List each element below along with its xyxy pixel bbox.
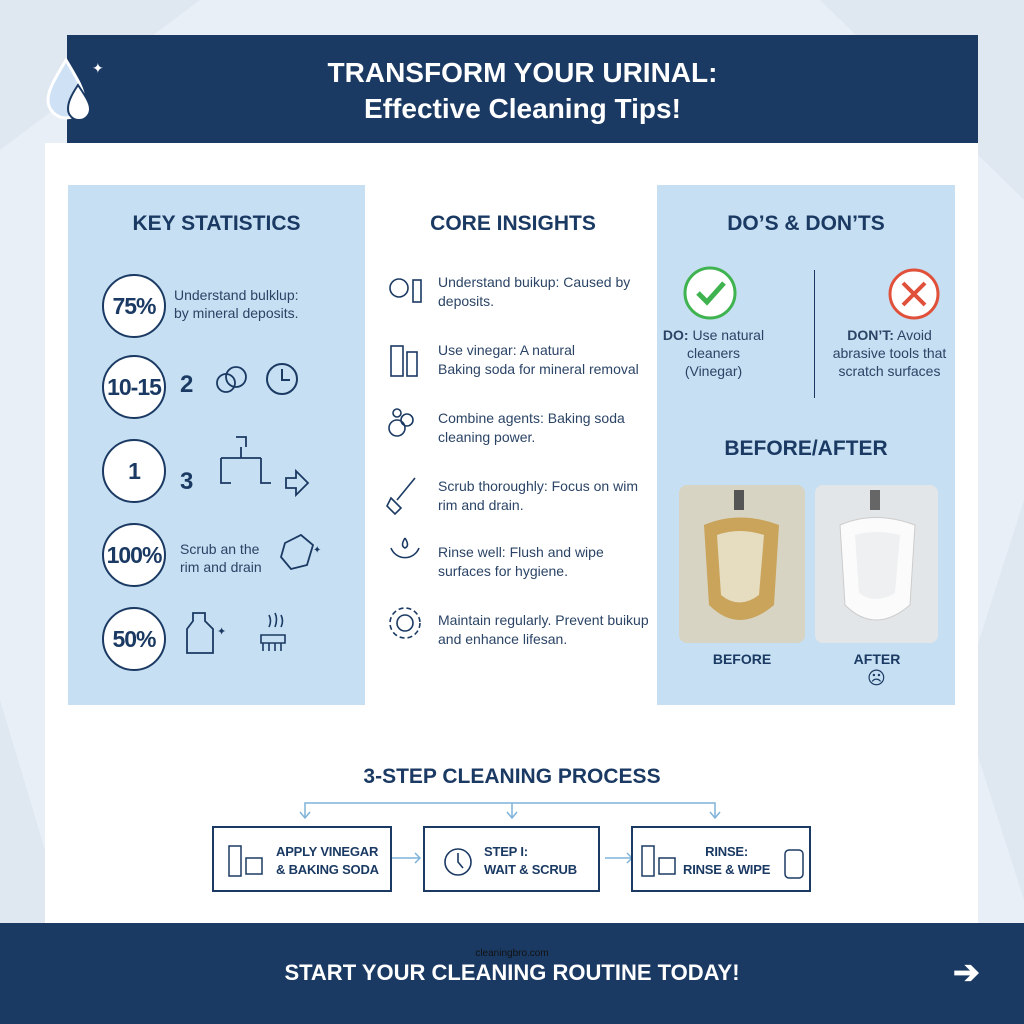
photo: before [679, 485, 805, 643]
icon: cross [888, 268, 940, 320]
dont text: DON’T: Avoid abrasive tools that scratch surfaces [833, 327, 946, 379]
text: surfaces for hygiene. [438, 563, 568, 579]
heading: core insights: CORE INSIGHTS [430, 212, 596, 235]
icon: check [684, 266, 736, 320]
panel: dos and donts [657, 185, 955, 705]
stat 10-15 [102, 355, 166, 419]
text: Combine agents: Baking soda [438, 410, 625, 426]
panel: dos and donts: ☹ [867, 668, 886, 688]
header: Effective Cleaning Tips! [364, 93, 681, 124]
header [67, 35, 978, 143]
panel: dos and donts: AFTER [854, 651, 900, 667]
text: cleaning power. [438, 429, 535, 445]
panel: key statistics [68, 185, 365, 705]
step 3 [631, 826, 811, 892]
connector arrows [300, 802, 720, 864]
panel: key statistics: ✦ [217, 626, 226, 638]
panel: key statistics: ✦ [313, 545, 321, 556]
stat 10-15: 10-15 [107, 374, 161, 400]
text: and enhance lifesan. [438, 631, 567, 647]
step 2: STEP I: [484, 844, 528, 859]
header: TRANSFORM YOUR URINAL: [328, 57, 717, 88]
heading: dos and donts: DO’S & DON’TS [727, 212, 885, 235]
step 1: APPLY VINEGAR [276, 844, 378, 859]
watermark: cleaningbro.com [475, 948, 549, 959]
icon: water drops logo: ✦ [92, 60, 104, 76]
call to action: START YOUR CLEANING ROUTINE TODAY! [284, 960, 740, 985]
text: Maintain regularly. Prevent buikup [438, 612, 649, 628]
text: Baking soda for mineral removal [438, 361, 639, 377]
panel: key statistics: by mineral deposits. [174, 305, 299, 321]
panel: key statistics: Scrub an the [180, 541, 259, 557]
text: Use vinegar: A natural [438, 342, 575, 358]
stat 1: 1 [128, 458, 140, 484]
text: Scrub thoroughly: Focus on wim [438, 478, 638, 494]
icon: arrow: ➔ [953, 954, 980, 990]
panel: key statistics: 3 [180, 468, 193, 495]
step 1: & BAKING SODA [276, 862, 379, 877]
heading: 3-step process: 3-STEP CLEANING PROCESS [363, 765, 661, 788]
footer [0, 923, 1024, 1024]
insight texts: deposits. [438, 293, 494, 309]
heading: key statistics: KEY STATISTICS [132, 212, 301, 235]
do text: DO: Use natural cleaners (Vinegar) [663, 327, 764, 379]
panel: dos and donts: BEFORE [713, 651, 771, 667]
step 2 [423, 826, 600, 892]
stat 100%: 100% [107, 542, 161, 568]
stat 75%: 75% [112, 292, 156, 318]
insight texts [438, 274, 630, 309]
stat 50%: 50% [112, 626, 156, 652]
text: Rinse well: Flush and wipe [438, 544, 604, 560]
panel: key statistics: Understand bulklup: [174, 287, 299, 303]
heading: before after: BEFORE/AFTER [724, 437, 888, 460]
photo: after [815, 485, 938, 643]
icon: water drops logo [46, 58, 104, 120]
stat 100% [102, 523, 166, 587]
text: rim and drain. [438, 497, 524, 513]
step 3: RINSE: [705, 844, 748, 859]
white card [45, 143, 978, 925]
panel: key statistics: 2 [180, 371, 193, 398]
insight icons [386, 278, 422, 639]
step 3: RINSE & WIPE [683, 862, 770, 877]
step 2: WAIT & SCRUB [484, 862, 577, 877]
stat 50% [102, 607, 166, 671]
step 1 [212, 826, 392, 892]
stat 1 [102, 439, 166, 503]
insight texts: Understand buikup: Caused by [438, 274, 630, 290]
stat 75% [102, 274, 166, 338]
panel: key statistics: rim and drain [180, 559, 262, 575]
